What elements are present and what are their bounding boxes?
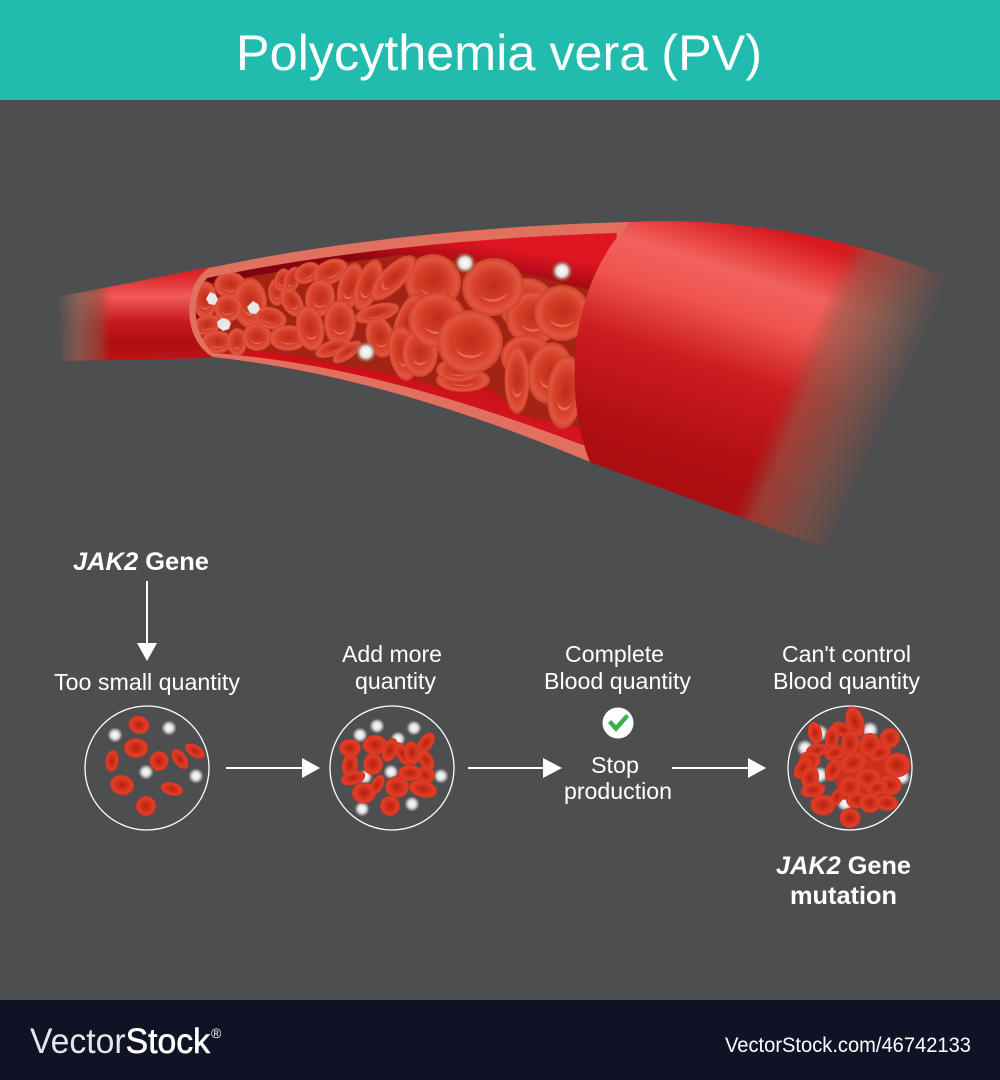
label: complete blood quantity — [544, 641, 691, 694]
label: add more quantity: quantity — [355, 668, 436, 694]
footer url: VectorStock.com/46742133 — [725, 1034, 971, 1057]
label: add more quantity: Add more — [342, 641, 442, 667]
circle 2: more cells — [330, 706, 454, 830]
label: add more quantity — [342, 641, 442, 694]
label: can't control blood quantity: Blood quantity — [773, 668, 920, 694]
vessel lumen — [196, 233, 617, 450]
platelets in vessel — [206, 252, 573, 363]
wide vessel end — [574, 221, 948, 548]
label: stop production: Stop — [591, 752, 639, 778]
title: Polycythemia vera (PV) — [236, 25, 762, 81]
label: too small quantity: Too small quantity — [54, 669, 241, 695]
narrow vessel end — [58, 266, 215, 361]
JAK2 Gene mutation label: JAK2 Gene — [776, 852, 911, 880]
label: complete blood quantity: Blood quantity — [544, 668, 691, 694]
footer bar — [0, 1000, 1000, 1080]
circle 3: excess cells — [788, 704, 912, 830]
title banner — [0, 0, 1000, 100]
red blood cells in vessel — [190, 248, 590, 430]
label: complete blood quantity: Complete — [565, 641, 664, 667]
registered mark: ® — [211, 1025, 222, 1041]
label: stop production — [564, 752, 672, 804]
footer logo: VectorStock — [30, 1022, 210, 1061]
arrow 1 — [226, 758, 320, 778]
label: stop production: production — [564, 778, 672, 804]
label: can't control blood quantity — [773, 641, 920, 694]
circle 1: few cells — [85, 706, 209, 830]
icon: check mark — [602, 708, 634, 738]
arrow 3 — [672, 758, 766, 778]
JAK2 Gene mutation label — [776, 852, 911, 910]
arrow: gene down — [137, 581, 157, 661]
label: can't control blood quantity: Can't control — [782, 641, 911, 667]
blood vessel illustration — [58, 221, 948, 548]
JAK2 Gene heading: JAK2 Gene — [73, 548, 209, 576]
vessel wall — [189, 222, 630, 470]
JAK2 Gene mutation label: mutation — [790, 882, 897, 910]
arrow 2 — [468, 758, 562, 778]
